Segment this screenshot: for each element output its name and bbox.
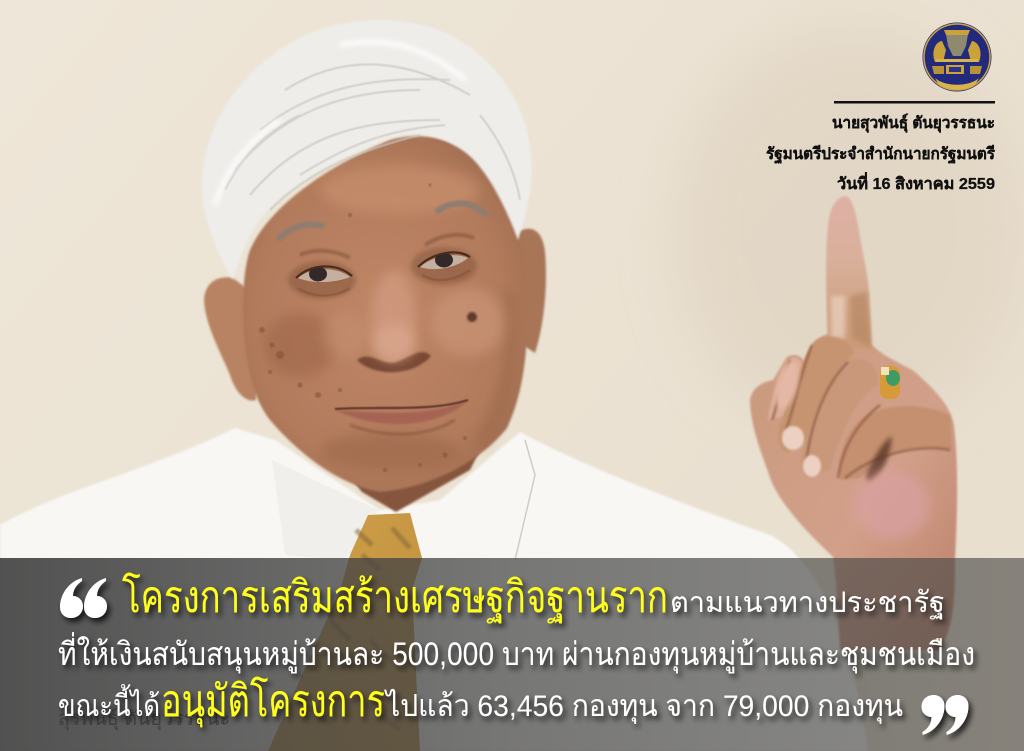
icon: opening quote mark bbox=[60, 578, 107, 618]
divider rule above signature bbox=[834, 101, 995, 104]
line 3 highlight: อนุมัติโครงการ bbox=[161, 676, 385, 728]
shirt bbox=[0, 428, 868, 751]
finger shading bbox=[829, 288, 871, 347]
mole bbox=[467, 312, 477, 322]
name: นายสุวพันธุ์ ตันยุวรรธนะ bbox=[832, 113, 995, 133]
eye left bbox=[288, 261, 356, 299]
skin spots bbox=[259, 184, 467, 472]
eye right bbox=[411, 247, 477, 285]
faint caption behind panel: สุรพันธุ์ ตันยุวรรธนะ bbox=[58, 707, 230, 731]
ear left bbox=[204, 277, 262, 401]
raised hand with pointing finger bbox=[750, 196, 957, 650]
attribution block bbox=[766, 113, 995, 193]
hair bbox=[202, 20, 532, 280]
fingertips bbox=[771, 359, 821, 477]
palm shadow bbox=[866, 436, 892, 482]
portrait: man with white hair bbox=[202, 20, 546, 512]
line 1 highlight: โครงการเสริมสร้างเศรษฐกิจฐานราก bbox=[122, 572, 668, 623]
eyebrows bbox=[278, 203, 487, 258]
line 1 end: ตามแนวทางประชารัฐ bbox=[670, 587, 945, 620]
ear right bbox=[515, 229, 546, 353]
line 3 end: ไปแล้ว 63,456 กองทุน จาก 79,000 กองทุน bbox=[384, 688, 903, 725]
icon: closing quote mark bbox=[922, 695, 968, 735]
neck bbox=[320, 430, 490, 512]
nose bbox=[357, 324, 431, 372]
necktie bbox=[268, 513, 422, 751]
date: วันที่ 16 สิงหาคม 2559 bbox=[837, 172, 995, 193]
palm bbox=[750, 334, 957, 650]
position: รัฐมนตรีประจำสำนักนายกรัฐมนตรี bbox=[766, 144, 995, 164]
line 3 start: ขณะนี้ได้ bbox=[58, 684, 160, 723]
mouth bbox=[335, 400, 468, 434]
palm highlight bbox=[854, 471, 930, 539]
quote panel bbox=[0, 558, 1024, 751]
government seal bbox=[922, 22, 992, 92]
cheek tones bbox=[264, 270, 510, 472]
forehead highlight bbox=[320, 166, 480, 214]
quote text bbox=[58, 572, 975, 735]
curled fingers bbox=[768, 337, 952, 480]
ring bbox=[880, 366, 900, 399]
face bbox=[243, 136, 527, 492]
pointing finger bbox=[826, 196, 872, 350]
